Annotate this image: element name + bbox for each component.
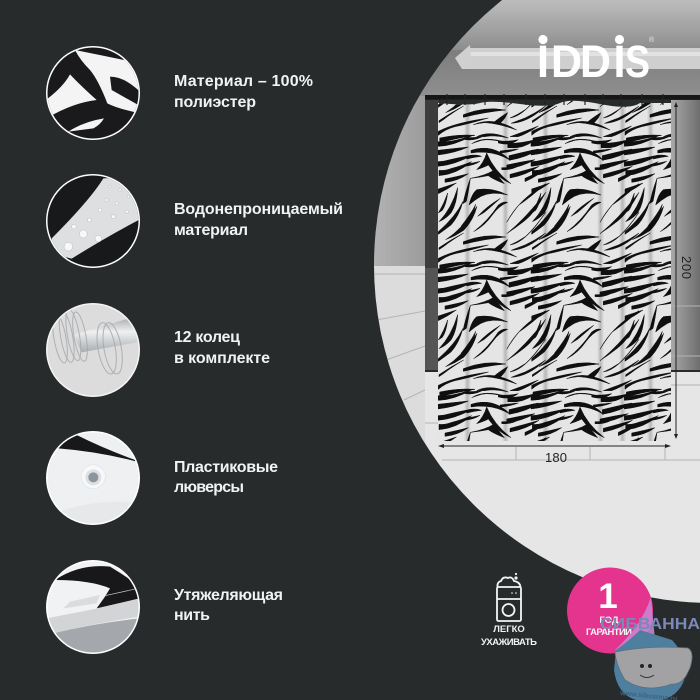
feature 3: rings bbox=[46, 303, 270, 397]
feature 5: weighted thread bbox=[46, 560, 283, 657]
icon: water drops on fabric bbox=[46, 174, 140, 268]
text: grommets bbox=[174, 459, 278, 496]
icon: washing machine bbox=[497, 573, 521, 621]
dimension: height 200 bbox=[674, 102, 694, 439]
badge: one year warranty bbox=[567, 568, 653, 654]
logo: IDDIS: ® bbox=[649, 36, 655, 44]
text: weighted thread: нить bbox=[174, 607, 210, 624]
text: warranty: ГОД bbox=[599, 615, 619, 626]
logo: IDDIS: S bbox=[625, 36, 650, 87]
text: easy care: УХАЖИВАТЬ bbox=[481, 637, 537, 648]
text: grommets: Пластиковые bbox=[174, 459, 278, 476]
text: weighted thread: Утяжеляющая bbox=[174, 587, 283, 604]
logo: IDDIS: D bbox=[580, 36, 611, 87]
text: warranty: ГАРАНТИИ bbox=[586, 627, 632, 638]
text: rings: в комплекте bbox=[174, 350, 270, 367]
text: easy care bbox=[481, 624, 537, 648]
icon: plastic grommet bbox=[46, 431, 140, 527]
text: warranty bbox=[586, 615, 632, 638]
text: material: Материал – 100% bbox=[174, 73, 313, 90]
logo: IDDIS: I bbox=[537, 36, 549, 87]
icon: rings on rod bbox=[46, 303, 140, 397]
logo: IDDIS: I bbox=[614, 36, 626, 87]
logo: IDDIS bbox=[537, 35, 655, 87]
text: waterproof bbox=[174, 201, 343, 239]
dimension: width 180 bbox=[438, 444, 671, 465]
panel: bathroom photo in big circle bbox=[360, 0, 700, 612]
watermark: Sibvanna mascot bbox=[600, 597, 700, 700]
curtain with zebra pattern bbox=[438, 94, 671, 441]
text: rings bbox=[174, 329, 270, 367]
logo: IDDIS: D bbox=[551, 36, 582, 87]
icon: weighted thread hem bbox=[46, 560, 140, 657]
number 1: 1 bbox=[598, 577, 618, 616]
icon: zebra fabric bbox=[46, 46, 142, 140]
text: material bbox=[174, 73, 313, 111]
text: rings: 12 колец bbox=[174, 329, 240, 346]
dimension: height 200: 200 bbox=[679, 256, 694, 279]
text: waterproof: Водонепроницаемый bbox=[174, 201, 343, 218]
text: grommets: люверсы bbox=[174, 479, 244, 496]
badge: easy care bbox=[481, 573, 537, 648]
text: waterproof: материал bbox=[174, 222, 248, 239]
text: material: полиэстер bbox=[174, 94, 256, 111]
feature 2: waterproof bbox=[46, 174, 343, 268]
feature 1: material bbox=[46, 46, 313, 140]
feature 4: grommets bbox=[46, 431, 278, 527]
dimension: width 180: 180 bbox=[545, 450, 567, 465]
text: easy care: ЛЕГКО bbox=[493, 624, 525, 635]
curtain rings bbox=[447, 94, 663, 105]
watermark: Sibvanna mascot: СИБВАННА bbox=[600, 616, 700, 633]
text: weighted thread bbox=[174, 587, 283, 624]
